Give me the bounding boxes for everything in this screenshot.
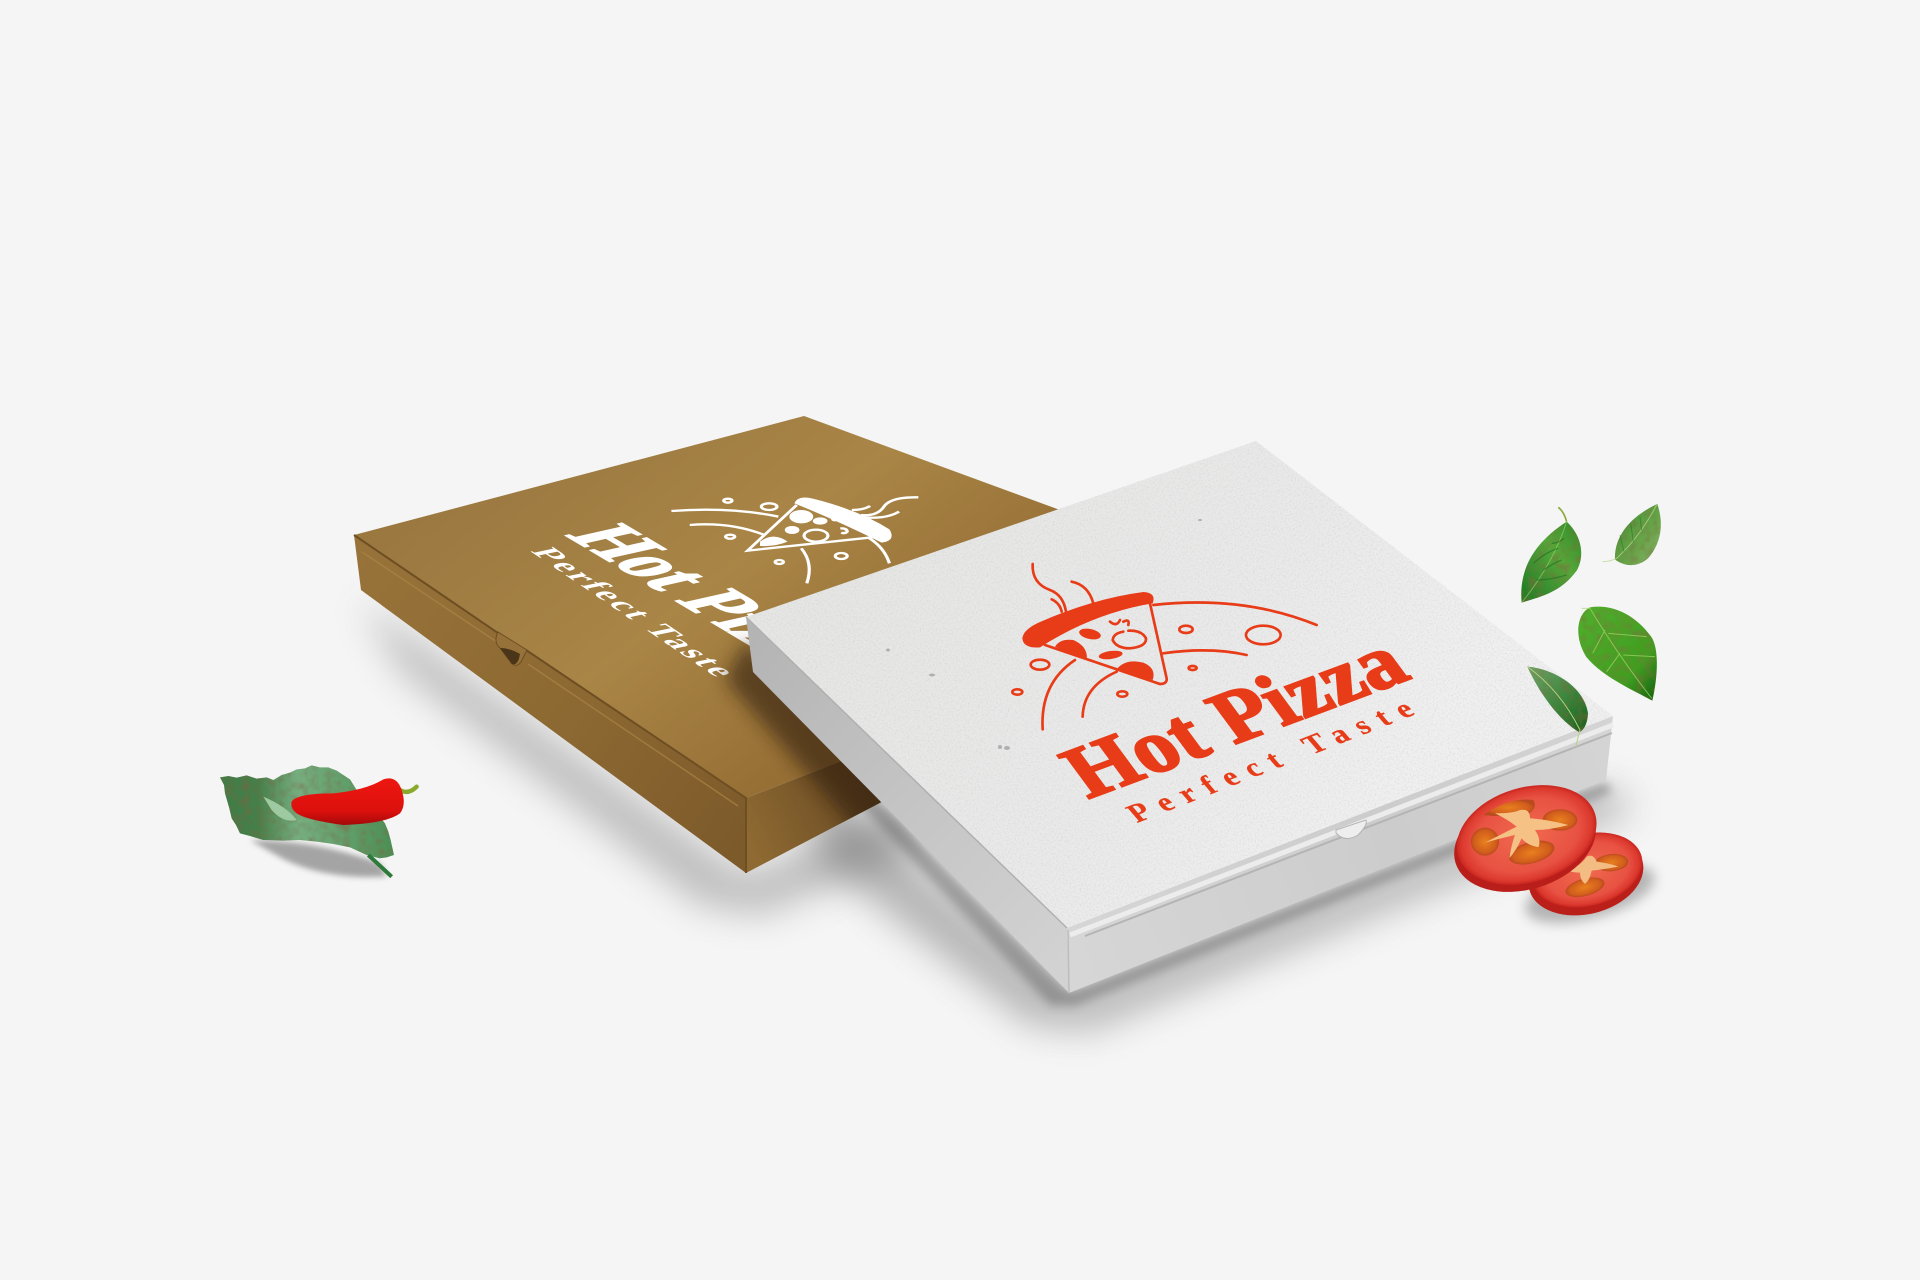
red logo pizza icon (1012, 564, 1317, 729)
white box paper grain (746, 441, 1613, 928)
chili pepper on leaf (220, 765, 417, 877)
brown box lid crease (362, 552, 738, 806)
tomato shadow (1519, 852, 1661, 935)
brown box tab hole (500, 648, 520, 664)
brown box right side (746, 700, 1000, 873)
red logo tagline: Perfect Taste (1120, 694, 1421, 828)
white box lid lip (1070, 725, 1613, 935)
white box front side (1067, 716, 1613, 993)
pepper stem (400, 787, 417, 792)
basil leaves and tomato slices (1442, 504, 1661, 935)
shadow: white box (800, 760, 1635, 1030)
white box lid crease (1085, 733, 1612, 936)
scene: pizza box mockup (220, 416, 1661, 1047)
brown box tab notch (496, 632, 527, 665)
leaf shadow (250, 840, 387, 877)
red pepper (291, 778, 404, 825)
red logo wordmark: Hot Pizza (1045, 620, 1423, 813)
white box edge highlight (746, 617, 1067, 928)
leaf highlight (263, 797, 297, 821)
basil leaf on box corner (1527, 667, 1588, 746)
basil leaf upper right (1603, 504, 1661, 565)
brown box lid lip (354, 535, 746, 873)
basil leaf upper left (1521, 507, 1581, 603)
white box tab (1336, 820, 1366, 839)
leaf stem (368, 855, 392, 877)
basil leaf center (1578, 607, 1657, 701)
contact shadow: white box (760, 680, 1612, 1006)
brown box top face (354, 416, 1060, 798)
brown box front side (354, 535, 746, 873)
panel: white pizza box (746, 441, 1613, 993)
white box bottom corner edge (1068, 930, 1069, 993)
brown logo tagline: Perfect Taste (522, 545, 746, 679)
tomato slice small (1520, 821, 1652, 927)
green leaf (220, 765, 394, 858)
white box left side (746, 617, 1069, 993)
tomato slice large (1442, 769, 1609, 908)
brown logo pizza icon (671, 497, 918, 583)
brown logo wordmark: Hot Pizza (547, 518, 885, 684)
panel: brown pizza box (354, 416, 1058, 873)
white box top face (746, 441, 1613, 928)
shadow: brown box (361, 600, 920, 915)
shadow of white box on brown box (715, 632, 882, 824)
paper speckles (886, 519, 1202, 750)
